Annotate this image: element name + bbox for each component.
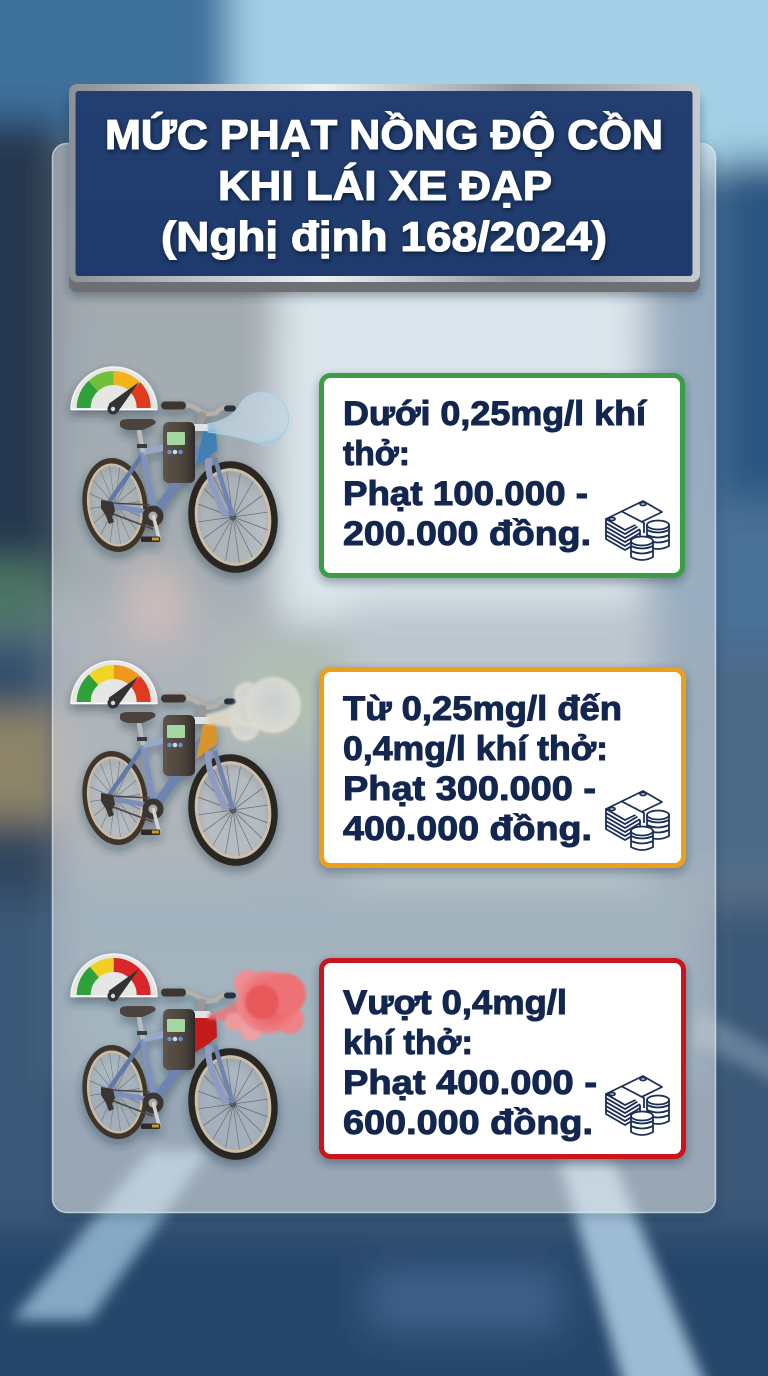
fine text: thở: (343, 435, 410, 473)
fine text: 400.000 đồng. (343, 810, 592, 848)
row 2: bicycle 0.25 to 0.4 (71, 661, 301, 867)
card: over 0.4 mg/l (322, 960, 684, 1156)
fine text: Từ 0,25mg/l đến (343, 690, 622, 728)
icon: bicycle with breathalyzer (80, 988, 280, 1161)
card: 0.25 to 0.4 mg/l (322, 670, 684, 866)
fine text: 200.000 đồng. (343, 515, 591, 553)
fine text: Phạt 300.000 - (343, 770, 596, 808)
title text (105, 110, 663, 260)
fine text: Phạt 100.000 - (343, 475, 588, 513)
icon: speedometer gauge medium (71, 661, 157, 708)
fine text: Vượt 0,4mg/l (343, 984, 567, 1022)
icon: clear breath balloon (208, 392, 289, 445)
icon: speedometer gauge high (71, 954, 157, 1002)
fine text (343, 690, 622, 848)
icon: grey breath cloud (206, 677, 301, 741)
icon: bicycle with breathalyzer (80, 402, 280, 574)
icon: money stack (606, 791, 669, 850)
row 1: bicycle under 0.25 (71, 367, 289, 574)
icon: red breath cloud (208, 970, 306, 1041)
fine text: 600.000 đồng. (343, 1104, 593, 1142)
title text: KHI LÁI XE ĐẠP (218, 162, 552, 209)
icon: bicycle with breathalyzer (80, 694, 280, 867)
fine text: 0,4mg/l khí thở: (343, 730, 608, 768)
card: under 0.25 mg/l (322, 376, 682, 576)
panel: frosted glass card (52, 144, 716, 1212)
row 3: bicycle over 0.4 (71, 954, 306, 1161)
icon: speedometer gauge low (71, 367, 157, 414)
fine text (343, 984, 597, 1142)
fine text: Dưới 0,25mg/l khí (343, 395, 648, 433)
title text: (Nghị định 168/2024) (161, 213, 607, 260)
fine text (343, 395, 648, 553)
fine text: Phạt 400.000 - (343, 1064, 597, 1102)
fine text: khí thở: (343, 1024, 473, 1062)
icon: money stack (606, 501, 669, 560)
icon: money stack (606, 1076, 669, 1135)
title banner (69, 84, 700, 292)
title text: MỨC PHẠT NỒNG ĐỘ CỒN (105, 110, 663, 158)
